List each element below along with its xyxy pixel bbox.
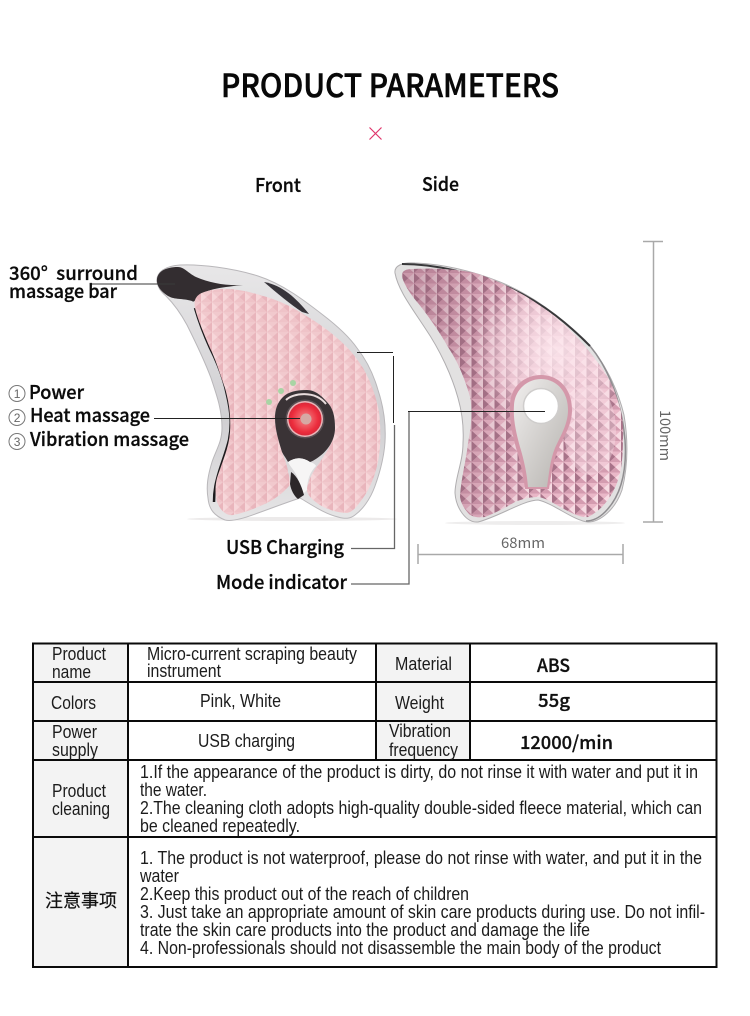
row: colors and weight: 55g	[538, 687, 571, 713]
mode indicator lights	[266, 380, 296, 405]
row: product name and material: Micro-current scraping beauty	[147, 643, 358, 664]
callout label: massage bar: 360° surround	[9, 259, 138, 286]
row: product name and material: Product	[52, 643, 106, 664]
row: product name and material: name	[52, 661, 91, 682]
callout label: functions list: 3	[14, 435, 21, 449]
row: product name and material: Material	[395, 653, 452, 674]
row: colors and weight: Colors	[51, 692, 96, 713]
row: product cleaning: Product	[52, 780, 106, 801]
callout label: massage bar	[9, 259, 138, 304]
table header cell shading	[33, 643, 470, 967]
control panel keyhole	[275, 390, 335, 462]
product illustration: side view	[390, 260, 630, 525]
callout label: massage bar: massage bar	[9, 277, 117, 304]
keyhole bezel	[510, 375, 572, 489]
parameters table	[33, 643, 716, 967]
row: colors and weight	[51, 687, 571, 713]
metal tip: massage bar	[157, 267, 243, 302]
row: product cleaning: be cleaned repeatedly.	[140, 815, 300, 836]
pink textured face	[195, 289, 380, 515]
row: power supply and vibration frequency: Vibration	[389, 720, 451, 741]
dimension: width	[418, 532, 623, 564]
row: product cleaning: cleaning	[52, 798, 110, 819]
callout lines	[90, 284, 545, 584]
dimension: height: 100mm	[655, 410, 676, 461]
row: product cleaning	[52, 761, 702, 836]
row: product name and material: ABS	[537, 652, 570, 678]
row: precautions: trate the skin care products into the product and damage the life	[140, 919, 590, 940]
row: product name and material	[52, 643, 570, 682]
product illustration: front view	[157, 265, 397, 521]
row: precautions: 注意事项	[45, 891, 117, 911]
callout label: functions list: Power	[29, 378, 84, 405]
heading: front view: Front	[255, 171, 301, 198]
row: colors and weight: Pink, White	[200, 690, 281, 711]
title: PRODUCT PARAMETERS	[221, 61, 559, 107]
callout label: functions list: Vibration massage	[29, 425, 189, 452]
dimension: height	[643, 241, 676, 522]
row: precautions: water	[139, 865, 179, 886]
row: power supply and vibration frequency	[52, 720, 613, 760]
charging port	[524, 388, 558, 424]
row: power supply and vibration frequency: supply	[52, 739, 99, 760]
row: power supply and vibration frequency: frequency	[389, 739, 459, 760]
callout label: functions list: Heat massage	[30, 401, 150, 428]
row: product name and material: instrument	[147, 660, 221, 681]
callout label: USB charging: USB Charging	[226, 533, 344, 560]
row: precautions: 4. Non-professionals should not disassemble the main body of the product	[140, 937, 661, 958]
row: power supply and vibration frequency: Power	[52, 721, 97, 742]
row: precautions	[45, 847, 705, 958]
row: precautions: 2.Keep this product out of the reach of children	[140, 883, 469, 904]
callout label: functions list: 2	[14, 411, 21, 425]
callout label: functions list	[9, 378, 189, 452]
heading: side view: Side	[422, 170, 459, 197]
dimension: width: 68mm	[501, 532, 545, 553]
power button	[286, 400, 324, 438]
row: power supply and vibration frequency: 12000/min	[520, 729, 613, 755]
callout label: functions list: 1	[14, 387, 21, 401]
row: product cleaning: the water.	[140, 779, 207, 800]
callout label: mode indicator: Mode indicator	[216, 568, 347, 595]
row: colors and weight: Weight	[395, 692, 444, 713]
pink textured shell	[402, 268, 624, 518]
row: power supply and vibration frequency: USB charging	[198, 730, 295, 751]
icon: pink cross mark	[370, 128, 382, 140]
